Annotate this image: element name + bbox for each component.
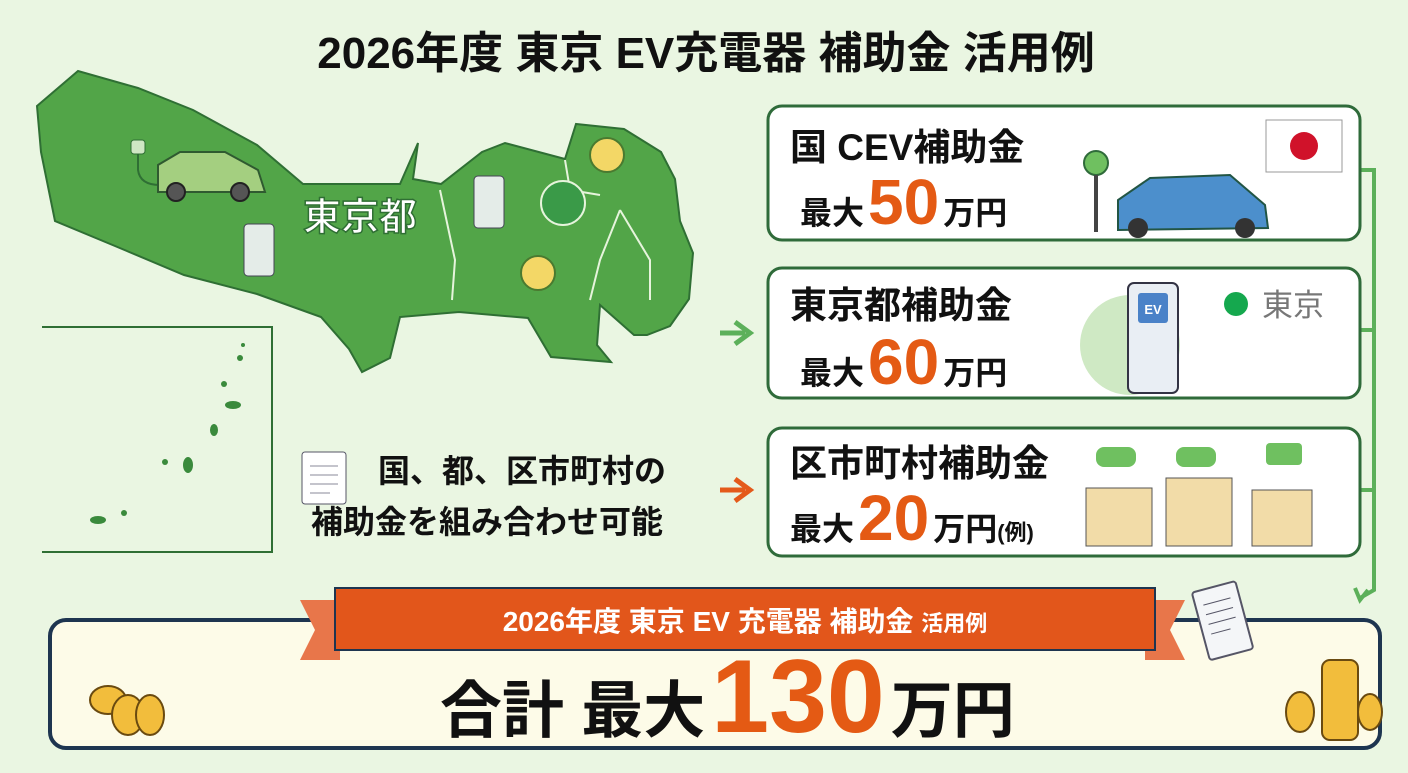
- icon: coins right: [1286, 660, 1382, 740]
- panel: municipal: 区市町村補助金: [790, 443, 1049, 484]
- icon: coins left: [90, 686, 164, 735]
- icon: buildings: [1086, 443, 1312, 546]
- total text: 合計 最大130万円: [440, 639, 1015, 755]
- icon: blue car: [1084, 151, 1268, 238]
- arrow: orange: [720, 479, 750, 501]
- panel: municipal: 最大20万円(例): [790, 482, 1034, 554]
- icon: plug circle: [541, 181, 585, 225]
- icon: document: [302, 452, 346, 504]
- icon: charger ev: [1128, 283, 1178, 393]
- panel: national: 国 CEV補助金: [790, 127, 1024, 168]
- logo: tokyo: 東京: [1262, 288, 1324, 323]
- arrow: green: [720, 322, 750, 344]
- text: combine note: [311, 453, 666, 540]
- icon: charger 1: [244, 224, 274, 276]
- map label: 東京都: [303, 197, 417, 239]
- icon: ev car: [131, 140, 265, 201]
- icon: document: [1192, 581, 1253, 660]
- text: combine note: 補助金を組み合わせ可能: [311, 504, 663, 540]
- ribbon: 2026年度 東京 EV 充電器 補助金 活用例: [503, 606, 987, 637]
- icon: bolt 2: [521, 256, 555, 290]
- text: combine note: 国、都、区市町村の: [378, 453, 666, 489]
- map: tokyo: [37, 71, 693, 372]
- connector line: [1355, 170, 1374, 600]
- panel: municipal: [768, 428, 1360, 556]
- inset: islands: [42, 327, 272, 552]
- ribbon: [300, 588, 1185, 660]
- icon: charger 2: [474, 176, 504, 228]
- icon: japan flag: [1266, 120, 1342, 172]
- title: 2026年度 東京 EV充電器 補助金 活用例: [317, 29, 1095, 78]
- icon: charger ev: EV: [1144, 302, 1162, 317]
- panel: national: [768, 106, 1360, 240]
- panel: tokyo: 東京都補助金: [790, 285, 1012, 326]
- logo: tokyo: [1224, 288, 1324, 323]
- panel: total: [50, 581, 1382, 755]
- icon: bolt 1: [590, 138, 624, 172]
- panel: tokyo: [768, 268, 1360, 398]
- panel: tokyo: 最大60万円: [800, 326, 1007, 398]
- panel: national: 最大50万円: [800, 166, 1007, 238]
